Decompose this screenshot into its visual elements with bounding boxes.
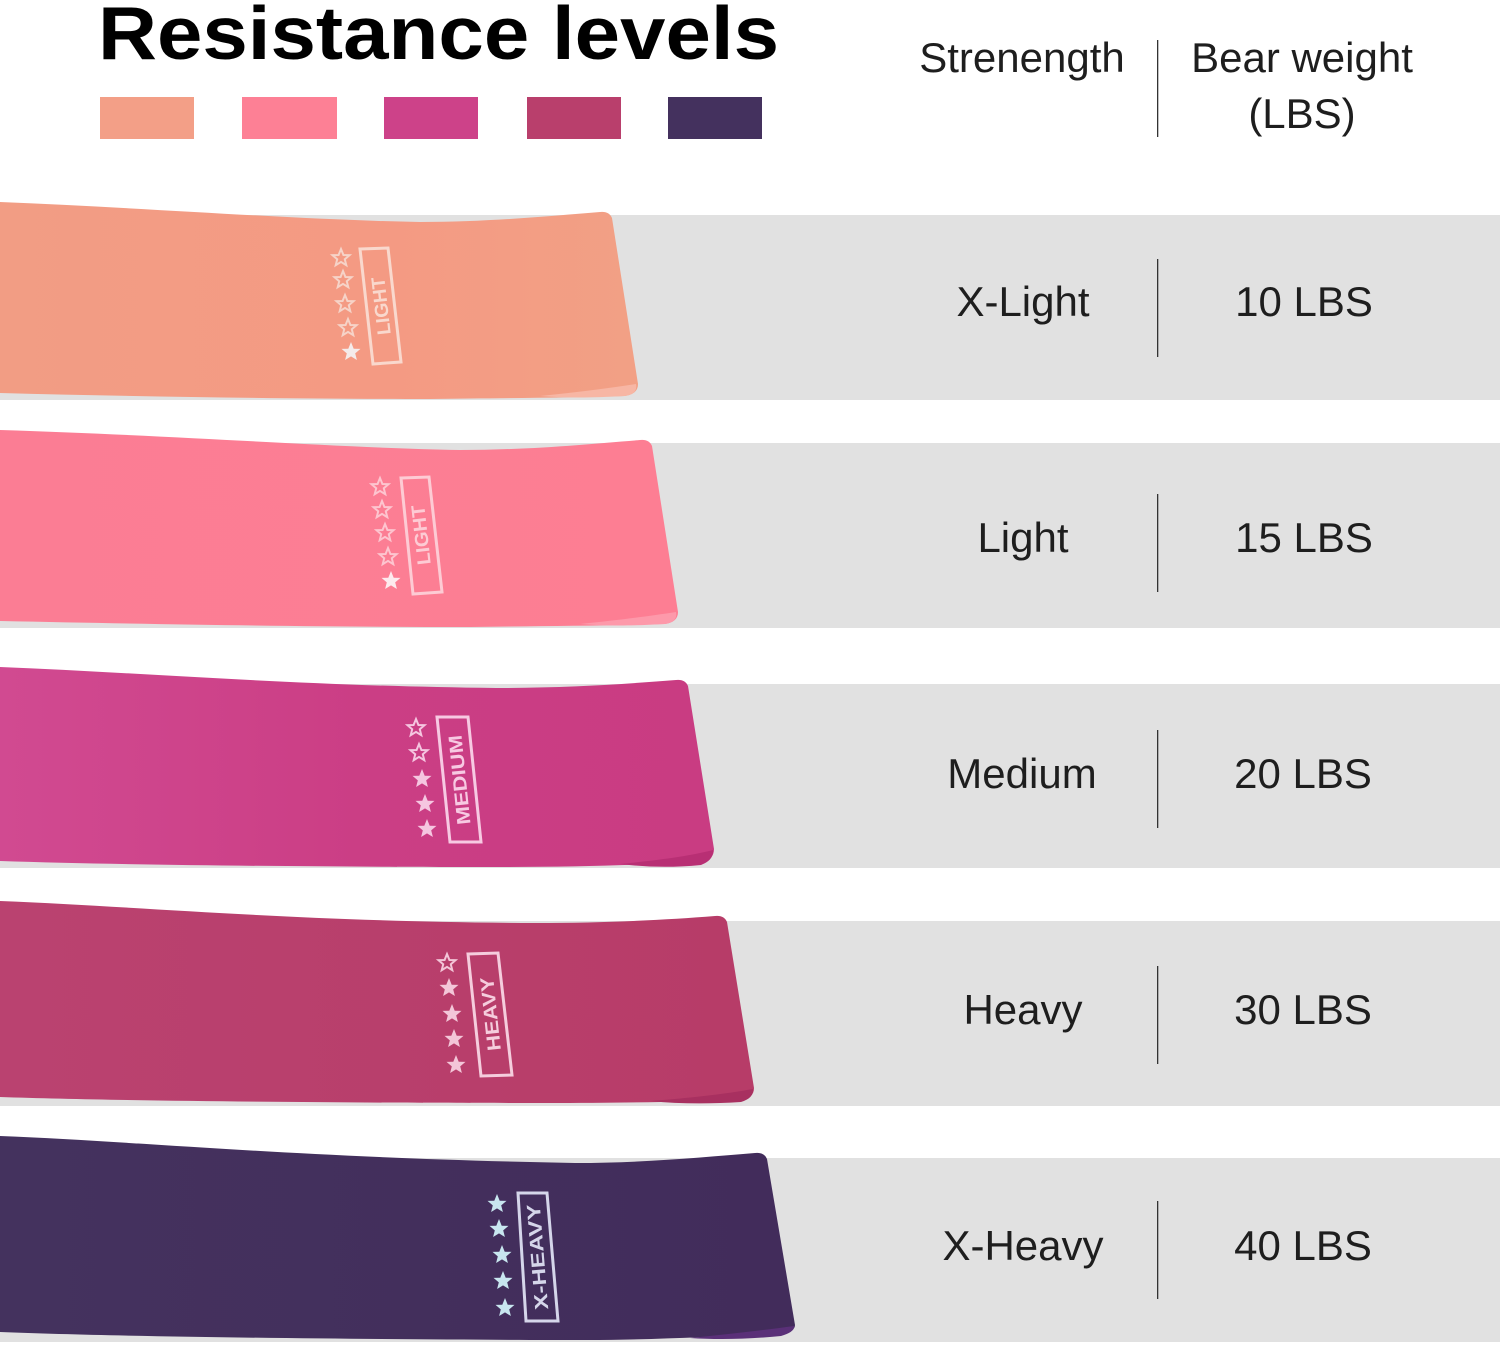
label box: MEDIUM [437, 717, 481, 842]
row: X-Light: 10 LBS [1235, 278, 1373, 325]
stars [488, 1194, 514, 1316]
row: X-Heavy: X-Heavy [942, 1222, 1104, 1269]
label box: LIGHT [360, 248, 401, 364]
row: Light: Light [977, 514, 1069, 561]
row: Medium: Medium [947, 750, 1097, 797]
label box: X-HEAVY: X-HEAVY [524, 1203, 553, 1311]
table header: Strenength [919, 34, 1125, 81]
label box: HEAVY [468, 953, 512, 1076]
stars [371, 478, 400, 589]
row: X-Heavy: 40 LBS [1234, 1222, 1372, 1269]
row: X-Light: X-Light [956, 278, 1090, 325]
stars [438, 954, 466, 1073]
row: X-Heavy [0, 1158, 1500, 1342]
row: Heavy: 30 LBS [1234, 986, 1372, 1033]
row: Medium: 20 LBS [1234, 750, 1372, 797]
band: X-Light peach [0, 202, 638, 399]
label box: X-HEAVY [518, 1193, 558, 1321]
row: Heavy: Heavy [963, 986, 1083, 1033]
table header: Bear weight [1191, 34, 1413, 81]
table header: (LBS) [1248, 90, 1356, 137]
stars [332, 249, 360, 360]
row: Medium [0, 684, 1500, 868]
band: Light pink [0, 430, 678, 627]
label box: LIGHT [401, 477, 442, 594]
row: Light [0, 443, 1500, 628]
band: Medium magenta [0, 667, 714, 867]
row: Light: 15 LBS [1235, 514, 1373, 561]
row: X-Light [0, 215, 1500, 400]
band: X-Heavy purple [0, 1136, 795, 1340]
label box: MEDIUM: MEDIUM [445, 734, 475, 826]
band: Heavy rose [0, 901, 754, 1103]
label box: LIGHT: LIGHT [408, 504, 436, 566]
label box: HEAVY: HEAVY [477, 976, 506, 1052]
colour swatch legend [100, 97, 762, 139]
row: Heavy [0, 921, 1500, 1106]
table header [919, 34, 1413, 137]
stars [407, 719, 436, 837]
label box: LIGHT: LIGHT [368, 276, 396, 336]
